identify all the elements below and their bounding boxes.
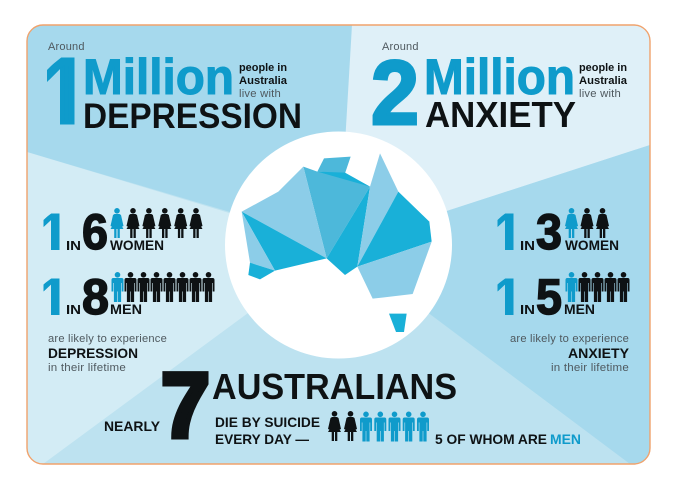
heading: two million anxiety xyxy=(371,41,628,144)
text: depression lifetime: are likely to experience xyxy=(48,333,167,345)
stat: 1 in 3 women: IN xyxy=(520,238,535,253)
heading: two million anxiety: Million xyxy=(424,49,575,105)
stat: 1 in 6 women: 6 xyxy=(82,204,108,260)
panel: depression headline xyxy=(28,26,352,212)
stat: 1 in 5 men: MEN xyxy=(564,301,595,317)
panel: anxiety statistics xyxy=(429,145,650,464)
stat: 1 in 3 women xyxy=(498,208,618,250)
stat: 1 in 5 men: 1 xyxy=(495,270,520,327)
stat: 1 in 5 men: 5 xyxy=(536,269,562,325)
panel: anxiety headline xyxy=(346,26,650,211)
heading: one million depression: Million xyxy=(83,49,234,105)
stat: 1 in 8 men: 8 xyxy=(82,269,109,325)
callout: nearly 7 Australians: EVERY DAY — xyxy=(215,431,309,447)
callout: nearly 7 Australians: NEARLY xyxy=(104,418,161,434)
text: anxiety lifetime: are likely to experience xyxy=(510,333,629,345)
stat: 1 in 8 men: MEN xyxy=(110,301,142,317)
map of Australia xyxy=(242,153,432,332)
stat: 1 in 8 men: 1 xyxy=(41,270,66,327)
text: depression lifetime xyxy=(48,333,167,374)
text: anxiety lifetime xyxy=(510,333,630,374)
stat: 1 in 5 men: IN xyxy=(520,302,535,317)
heading: two million anxiety: people in xyxy=(579,62,627,74)
heading: two million anxiety: Australia xyxy=(579,75,628,87)
stat: 1 in 6 women: 1 xyxy=(41,205,66,262)
text: depression lifetime: DEPRESSION xyxy=(48,345,138,361)
heading: one million depression xyxy=(47,42,300,128)
heading: one million depression: live with xyxy=(239,88,281,100)
stat: 1 in 6 women: WOMEN xyxy=(110,237,164,253)
heading: two million anxiety: ANXIETY xyxy=(425,94,576,135)
heading: one million depression: people in xyxy=(239,62,287,74)
centre circle xyxy=(225,132,452,358)
callout: nearly 7 Australians: 5 OF WHOM ARE xyxy=(435,431,547,447)
text: anxiety lifetime: ANXIETY xyxy=(568,345,630,361)
stat: 1 in 3 women: WOMEN xyxy=(565,237,619,253)
heading: one million depression: Australia xyxy=(239,75,288,87)
stat: 1 in 6 women xyxy=(44,208,202,250)
heading: two million anxiety: 2 xyxy=(371,43,419,144)
stat: 1 in 3 women: 3 xyxy=(536,204,562,260)
heading: one million depression: 1 xyxy=(44,41,86,146)
heading: two million anxiety: live with xyxy=(579,88,621,100)
callout: nearly 7 Australians: MEN xyxy=(550,431,581,447)
callout: nearly 7 Australians xyxy=(104,355,581,457)
callout: nearly 7 Australians: AUSTRALIANS xyxy=(212,366,457,407)
stat: 1 in 5 men xyxy=(498,272,630,316)
callout: nearly 7 Australians: 7 xyxy=(161,355,210,457)
heading: one million depression: DEPRESSION xyxy=(83,97,302,136)
stat: 1 in 6 women: IN xyxy=(66,238,81,253)
callout: nearly 7 Australians: DIE BY SUICIDE xyxy=(215,414,320,430)
heading: one million depression: Around xyxy=(48,41,85,53)
heading: two million anxiety: Around xyxy=(382,41,419,53)
text: anxiety lifetime: in their lifetime xyxy=(551,362,629,374)
stat: 1 in 8 men xyxy=(44,272,214,316)
text: depression lifetime: in their lifetime xyxy=(48,362,126,374)
stat: 1 in 3 women: 1 xyxy=(495,205,520,262)
stat: 1 in 8 men: IN xyxy=(66,302,81,317)
panel: depression statistics xyxy=(28,152,248,464)
